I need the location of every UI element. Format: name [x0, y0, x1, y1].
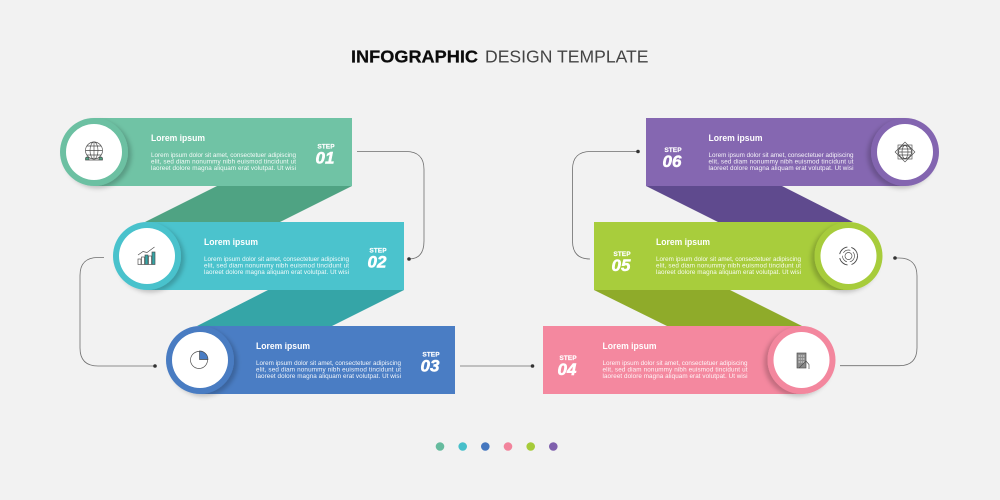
body text: [656, 256, 801, 276]
body text: Lorem ipsum dolor sit amet, consectetuer adipiscing: [256, 360, 401, 367]
body text: elit, sed diam nonummy nibh euismod tincidunt ut: [256, 367, 401, 374]
body text: Lorem ipsum dolor sit amet, consectetuer adipiscing: [708, 152, 854, 159]
band: purple: [646, 118, 905, 186]
white disc: [877, 124, 933, 180]
step label: 01: [316, 148, 334, 168]
band: blue: [200, 326, 455, 394]
white disc: [66, 124, 122, 180]
body text: [256, 360, 401, 380]
body text: [204, 256, 349, 276]
body text: elit, sed diam nonummy nibh euismod tincidunt ut: [656, 263, 801, 270]
body text: [708, 152, 854, 172]
step label: 03: [421, 356, 440, 376]
arrow: step 04 to 05: [840, 256, 917, 366]
panel: step 01: [60, 118, 352, 222]
body text: laoreet dolore magna aliquam erat volutpat. Ut wisi: [602, 373, 748, 380]
heading: Lorem ipsum: [151, 133, 205, 144]
icon: pie chart: [190, 351, 208, 368]
icon: hand holding phone: [797, 353, 809, 369]
icon: circular arrows: [840, 247, 858, 265]
step label: 04: [558, 360, 577, 379]
title: INFOGRAPHIC: [351, 47, 478, 67]
icon: bar chart with trend: [138, 247, 155, 264]
step label: STEP: [422, 352, 440, 358]
body text: [151, 152, 296, 172]
arrow: step 05 to 06: [572, 150, 640, 259]
body text: laoreet dolore magna aliquam erat volutpat. Ut wisi: [256, 373, 401, 380]
arrow: step 03 to 04: [460, 364, 534, 368]
fold: teal: [197, 290, 404, 326]
body text: laoreet dolore magna aliquam erat volutpat. Ut wisi: [151, 165, 296, 172]
step label: STEP: [317, 144, 335, 150]
band: lime: [594, 222, 849, 290]
ring: blue: [166, 326, 234, 394]
body text: Lorem ipsum dolor sit amet, consectetuer adipiscing: [656, 256, 801, 263]
panel: step 03: [166, 326, 455, 394]
fold: purple: [646, 186, 853, 222]
white disc: [172, 332, 228, 388]
fold: lime: [594, 290, 802, 326]
band: teal: [147, 222, 404, 290]
ring: lime: [814, 222, 882, 290]
step label: STEP: [369, 248, 387, 254]
body text: Lorem ipsum dolor sit amet, consectetuer adipiscing: [151, 152, 296, 159]
body text: elit, sed diam nonummy nibh euismod tincidunt ut: [602, 367, 748, 374]
step label: 02: [368, 252, 387, 272]
heading: Lorem ipsum: [204, 237, 258, 248]
heading: Lorem ipsum: [708, 133, 762, 144]
step label: 05: [612, 256, 631, 275]
legend dots: [436, 442, 558, 451]
body text: elit, sed diam nonummy nibh euismod tincidunt ut: [708, 159, 854, 166]
panel: step 04: [543, 326, 836, 394]
band: pink: [543, 326, 802, 394]
ring: teal: [113, 222, 181, 290]
panel: step 02: [113, 222, 404, 326]
body text: Lorem ipsum dolor sit amet, consectetuer adipiscing: [602, 360, 748, 367]
title: DESIGN TEMPLATE: [485, 47, 648, 67]
body text: [602, 360, 748, 380]
band: green: [94, 118, 352, 186]
body text: laoreet dolore magna aliquam erat volutpat. Ut wisi: [708, 165, 854, 172]
body text: laoreet dolore magna aliquam erat volutpat. Ut wisi: [204, 269, 349, 276]
icon: globe with people: [86, 142, 102, 160]
body text: elit, sed diam nonummy nibh euismod tincidunt ut: [204, 263, 349, 270]
arrow: step 02 to 03: [80, 258, 157, 368]
panel: step 05: [594, 222, 882, 326]
white disc: [820, 228, 876, 284]
step label: STEP: [559, 355, 577, 362]
step label: STEP: [613, 251, 631, 258]
ring: purple: [871, 118, 939, 186]
heading: Lorem ipsum: [656, 237, 710, 248]
heading: Lorem ipsum: [602, 341, 656, 352]
step label: STEP: [664, 147, 682, 154]
body text: elit, sed diam nonummy nibh euismod tincidunt ut: [151, 159, 296, 166]
white disc: [774, 332, 830, 388]
ring: pink: [768, 326, 836, 394]
heading: Lorem ipsum: [256, 341, 310, 352]
arrow: step 01 to 02: [357, 152, 424, 261]
white disc: [119, 228, 175, 284]
body text: laoreet dolore magna aliquam erat volutpat. Ut wisi: [656, 269, 801, 276]
panel: step 06: [646, 118, 939, 222]
body text: Lorem ipsum dolor sit amet, consectetuer adipiscing: [204, 256, 349, 263]
title: [351, 47, 648, 67]
ring: green: [60, 118, 128, 186]
step label: 06: [663, 152, 682, 171]
fold: green: [145, 186, 352, 222]
icon: badge globe: [895, 142, 915, 162]
